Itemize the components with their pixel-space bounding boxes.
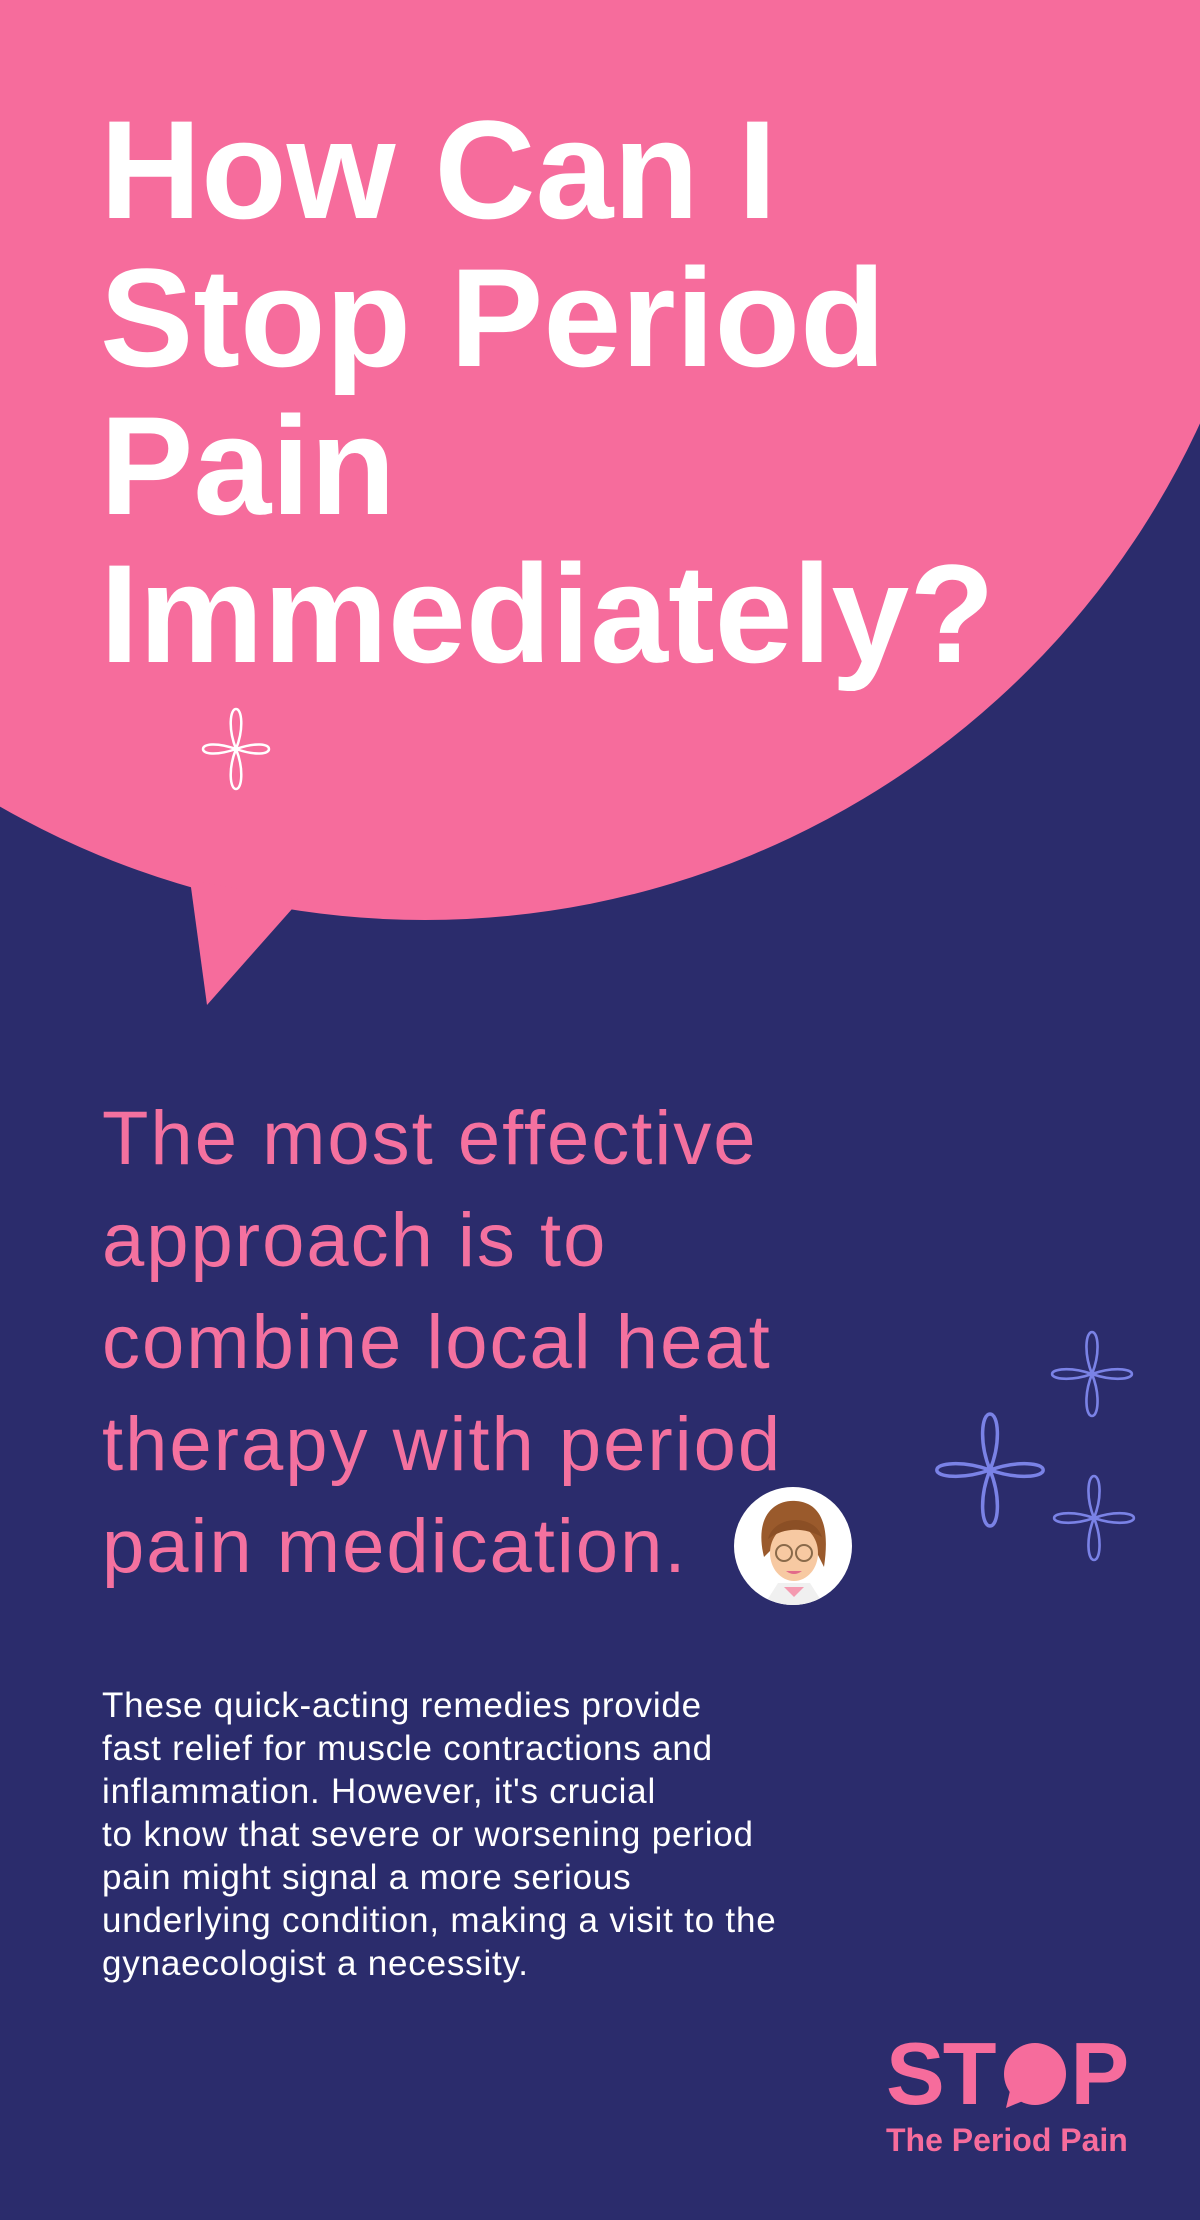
subheading: therapy with period xyxy=(102,1402,782,1487)
subheading: combine local heat xyxy=(102,1300,772,1385)
icon: sparkle cluster xyxy=(935,1330,1136,1562)
title: Immediately? xyxy=(100,535,995,692)
body text: These quick-acting remedies provide xyxy=(102,1686,702,1725)
avatar xyxy=(734,1487,852,1605)
subheading: The most effective xyxy=(102,1096,758,1181)
logo: ST P xyxy=(886,2024,1127,2123)
body text: to know that severe or worsening period xyxy=(102,1815,754,1854)
speech bubble xyxy=(0,0,1200,1005)
subheading: pain medication. xyxy=(102,1504,687,1589)
logo: The Period Pain xyxy=(886,2122,1128,2158)
body text: fast relief for muscle contractions and xyxy=(102,1729,713,1768)
title: How Can I xyxy=(100,91,777,248)
body text xyxy=(102,1686,776,1983)
subheading xyxy=(102,1096,782,1589)
title: Pain xyxy=(100,387,396,544)
body text: gynaecologist a necessity. xyxy=(102,1944,529,1983)
title xyxy=(100,91,995,692)
icon: sparkle in bubble xyxy=(202,708,270,790)
body text: underlying condition, making a visit to the xyxy=(102,1901,776,1940)
body text: pain might signal a more serious xyxy=(102,1858,631,1897)
body text: inflammation. However, it's crucial xyxy=(102,1772,656,1811)
subheading: approach is to xyxy=(102,1198,607,1283)
title: Stop Period xyxy=(100,239,886,396)
